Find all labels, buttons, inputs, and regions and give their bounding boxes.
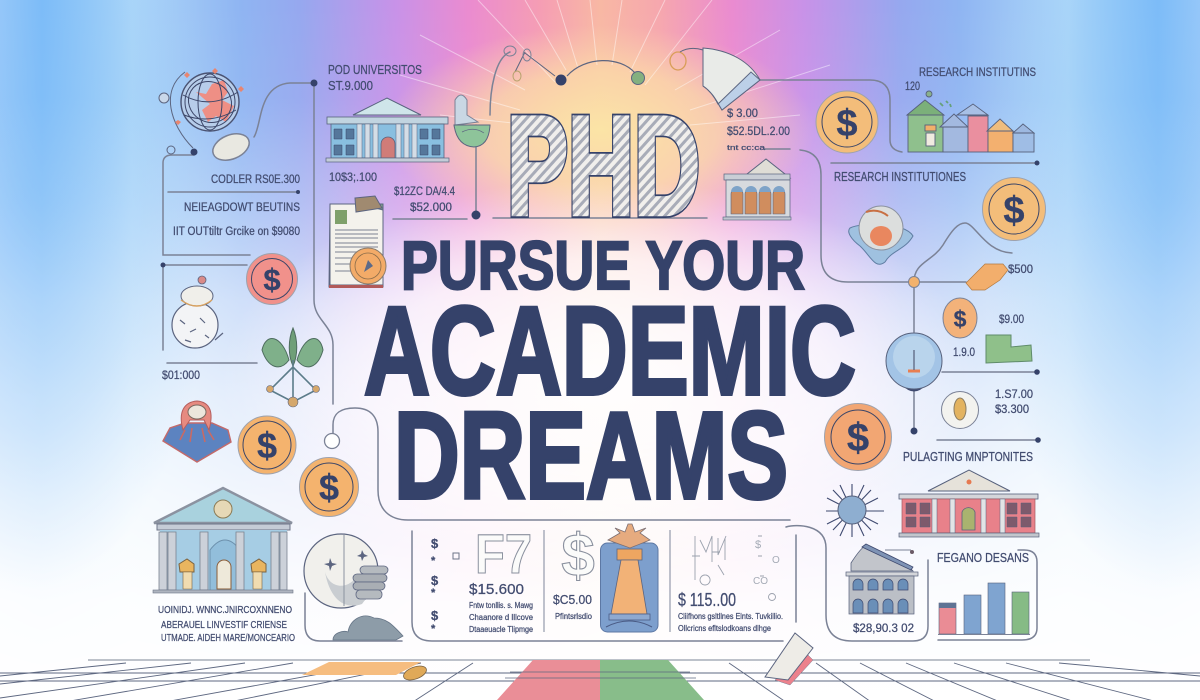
icon: document with seal <box>329 196 386 288</box>
floor: tile lines <box>505 672 696 678</box>
text: top centre stats: $ 3.00 <box>727 106 758 120</box>
text: first stat: $15.600 <box>469 581 524 598</box>
text: mid stat <box>394 184 455 214</box>
text: bank figure: $28,90.3 02 <box>853 623 914 635</box>
icon: coin top right <box>816 91 878 153</box>
icon: red building <box>899 470 1039 537</box>
icon: coin salmon: $ <box>263 262 281 297</box>
icon: sketch marks: $ <box>755 539 761 551</box>
text: pulagting heading: PULAGTING MNPTONITES <box>903 450 1033 464</box>
icon: blue classical bank <box>153 488 293 593</box>
text: stat under jar: $01:000 <box>162 368 200 382</box>
icon: chess tower on blue card <box>600 524 658 632</box>
text: research institutions top: RESEARCH INSTITUTINS <box>919 65 1036 79</box>
title: PHD hatched letters: PHD <box>507 87 700 244</box>
icon: small tilted-roof bank <box>846 544 918 614</box>
title: PURSUE YOUR: PURSUE YOUR <box>401 227 805 304</box>
text: dollar bullet list: * <box>431 623 436 635</box>
text: dollar bullet list: * <box>431 555 436 567</box>
icon: small oval coin <box>943 298 977 338</box>
text: mid stat: $12ZC DA/4.4 <box>394 184 455 198</box>
text: dollar bullet list: $ <box>431 536 439 551</box>
text: first stat: Dtaaeuacle Tlipmge <box>469 624 533 634</box>
text: dollar bullet list: $ <box>431 573 439 588</box>
icon: globe with orbit <box>159 68 244 156</box>
icon: orange parallelogram <box>966 264 1008 290</box>
icon: blue bulb <box>886 333 942 392</box>
icon: coin orange lower: $ <box>319 467 339 508</box>
text: third stat <box>678 590 783 633</box>
text: $9.00: $9.00 <box>999 312 1024 326</box>
icon: coin salmon <box>246 254 298 304</box>
bar chart <box>938 583 1030 634</box>
text: research institutions lower: RESEARCH INSTITUTIONES <box>834 170 966 184</box>
text: building caption: 10$3;.100 <box>329 170 377 184</box>
icon: jar <box>172 276 223 348</box>
text: first stat: Chaanore d Illcove <box>469 612 533 622</box>
floor: red tile <box>497 660 600 700</box>
floor: perspective grid <box>0 660 1200 700</box>
text: clock stats: 1.S7.00 <box>995 387 1033 401</box>
text: first stat: Fntw tonllis. s. Mawg <box>469 600 533 610</box>
text: second stat: $C5.00 <box>553 592 592 607</box>
text: top left university heading: ST.9.000 <box>328 78 373 93</box>
icon: specimen globe on blue puddle <box>849 206 913 264</box>
text: research institutions top: 120 <box>905 79 920 93</box>
text block: left column labels <box>160 172 300 268</box>
text: dollar bullet list <box>431 536 439 635</box>
icon: beaker figure <box>454 95 490 147</box>
text: research institutions top <box>905 65 1036 93</box>
text: outlined F7: F7 <box>475 522 532 585</box>
icon: row of houses <box>907 91 1034 152</box>
icon: coin orange left <box>238 416 296 474</box>
text: dollar bullet list: * <box>431 587 436 599</box>
node: right connector ends <box>910 369 1041 443</box>
icon: knotted string with planets <box>504 46 644 86</box>
text: fegano heading: FEGANO DESANS <box>937 551 1029 565</box>
panel: bottom stats <box>431 522 783 635</box>
text: top left university heading: POD UNIVERSITOS <box>328 62 422 77</box>
title: PHD hatched letters <box>507 87 700 244</box>
text: clock stats: $3.300 <box>995 402 1029 416</box>
text: third stat: Ollcricns efltslodkoans dlhge <box>678 623 771 633</box>
icon: coin orange left: $ <box>257 425 277 466</box>
text: mid stat: $52.000 <box>410 200 452 214</box>
text: top centre stats: $52.5DL.2.00 <box>727 124 790 138</box>
text: third stat: Cliifhons gsltllnes Elnts. Tuvkillio. <box>678 611 783 621</box>
text: top centre stats: tnt cc:ca <box>727 143 766 152</box>
title: PHD hatched letters: PHD <box>507 87 700 244</box>
sun rays <box>400 0 830 125</box>
floor: orange tile <box>302 662 421 675</box>
text: bottom left caption: ABERAUEL LINVESTIF CRIENSE <box>161 619 287 631</box>
icon: small ring <box>324 434 340 448</box>
icon: graduation cap fabric <box>670 48 760 110</box>
icon: sketch marks <box>692 536 780 600</box>
text: $500: $500 <box>1008 262 1033 276</box>
icon: star burst <box>826 484 884 537</box>
text block: left column labels: NEIEAGDOWT BEUTINS <box>184 200 300 214</box>
icon: red creature on blue shield <box>163 401 231 462</box>
text: 1.9.0: 1.9.0 <box>953 345 975 359</box>
icon: coin right: $ <box>1003 190 1025 232</box>
icon: university building arches <box>723 159 791 220</box>
icon: green plant emblem <box>262 328 323 407</box>
icon: university building blue <box>326 98 449 162</box>
text block: left column labels: IIT OUTtiltr Grcike on $9080 <box>173 226 300 238</box>
text: bottom left caption <box>158 604 295 644</box>
icon: coin orange lower <box>300 458 358 516</box>
icon: tilted paper <box>765 633 813 685</box>
text: third stat: $ 115..00 <box>678 590 736 610</box>
node: orange junction <box>908 276 920 288</box>
title: DREAMS: DREAMS <box>394 388 788 525</box>
title: ACADEMIC: ACADEMIC <box>364 282 856 421</box>
floor: pastry <box>402 663 428 683</box>
text: second stat <box>553 592 592 621</box>
text: top centre stats <box>727 106 790 152</box>
text: outlined dollar: $ <box>561 522 595 589</box>
floor: green tile <box>600 660 704 700</box>
text: second stat: Pfintsrlsdio <box>555 611 592 621</box>
node: divider end <box>1034 160 1040 166</box>
icon: coin top right: $ <box>836 103 858 145</box>
icon: cloud <box>333 616 403 640</box>
connector lines <box>163 52 1038 641</box>
icon: coin right <box>982 178 1046 240</box>
text: bottom left caption: UTMADE. AIDEH MARE/MONCEARIO <box>161 632 295 644</box>
icon: dish <box>209 129 253 165</box>
icon: sketch marks: CO <box>753 576 768 587</box>
icon: sketch marks: O <box>772 555 780 566</box>
icon: moon with hand <box>304 534 388 608</box>
icon: coin orange big <box>824 404 892 470</box>
node: beaker stem <box>472 210 480 220</box>
icon: compass clock <box>942 392 978 428</box>
icon: small square <box>453 553 459 559</box>
icon: green bill <box>986 335 1032 363</box>
icon: small oval coin: $ <box>954 306 967 332</box>
icon: coin orange big: $ <box>847 416 869 460</box>
text: top left university heading <box>328 62 422 93</box>
text: dollar bullet list: $ <box>431 608 439 623</box>
text: bottom left caption: UOINIDJ. WNNC.JNIRCOXNNENO <box>158 604 292 616</box>
text block: left column labels: CODLER RS0E.300 <box>211 172 300 186</box>
text: first stat <box>469 581 533 634</box>
node: connector top left <box>310 80 318 86</box>
text: clock stats <box>995 387 1033 416</box>
